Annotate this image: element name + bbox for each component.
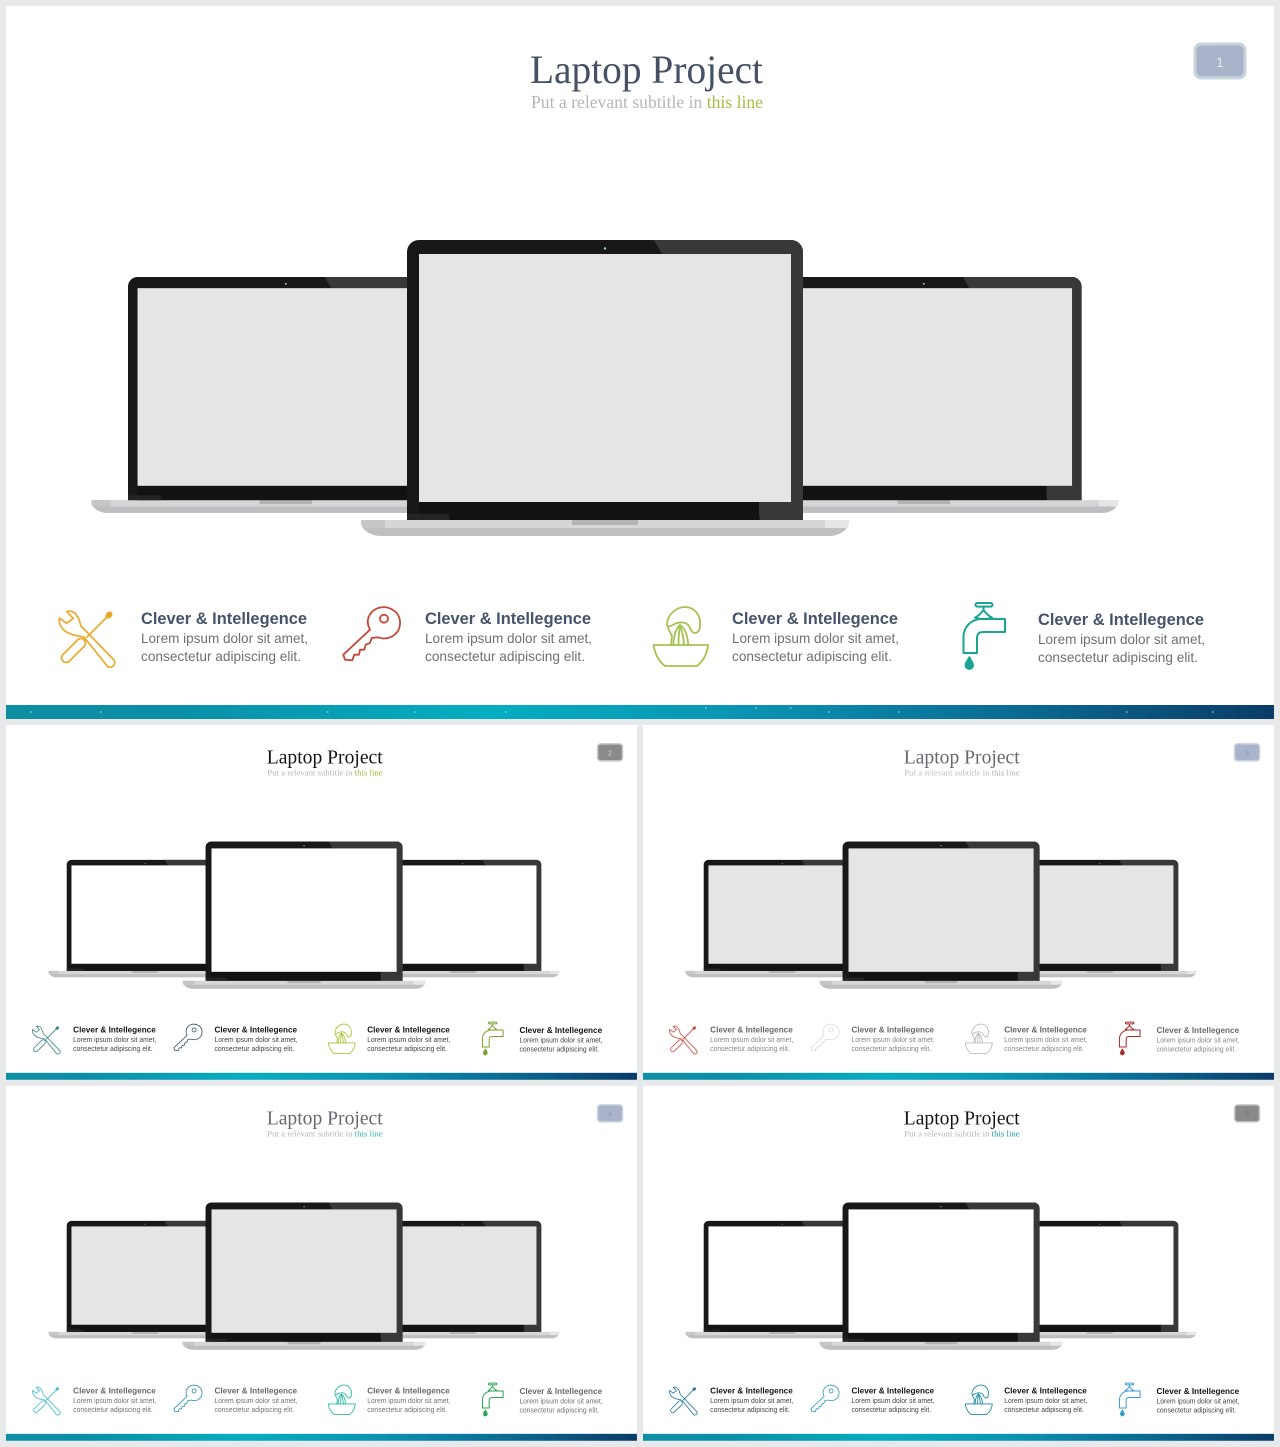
feature text 3: consectetur adipiscing elit. (367, 1046, 447, 1053)
feature text 3: consectetur adipiscing elit. (1004, 1407, 1084, 1414)
page number badge (1235, 744, 1260, 761)
icon: tools (669, 1026, 697, 1054)
page number badge: 2 (608, 750, 612, 757)
laptops (48, 841, 559, 989)
feature text 4: Clever & Intellegence (1157, 1386, 1239, 1396)
feature text 4: Clever & Intellegence (1038, 610, 1204, 629)
feature text 4: consectetur adipiscing elit. (520, 1046, 599, 1053)
feature text 2: Lorem ipsum dolor sit amet, (425, 630, 592, 646)
feature text 3: Lorem ipsum dolor sit amet, (1004, 1037, 1087, 1044)
feature text 2 (214, 1025, 298, 1053)
icon: key (174, 1385, 202, 1412)
panel: main slide 1 (6, 6, 1274, 719)
page number badge: 4 (608, 1111, 612, 1118)
feature text 3 (1004, 1386, 1087, 1414)
laptops (91, 240, 1118, 536)
icon: key (811, 1024, 839, 1051)
page number badge: 1 (1216, 54, 1224, 70)
feature text 4: Clever & Intellegence (520, 1025, 602, 1035)
feature text 1: Clever & Intellegence (73, 1386, 156, 1396)
feature text 4: consectetur adipiscing elit. (1157, 1407, 1236, 1414)
feature text 2 (214, 1386, 298, 1414)
feature text 2: consectetur adipiscing elit. (851, 1407, 931, 1414)
subtitle: Put a relevant subtitle in this line (267, 1129, 383, 1139)
feature text 3 (1004, 1025, 1087, 1053)
bottom gradient bar (6, 1434, 637, 1441)
feature text 1: consectetur adipiscing elit. (73, 1407, 153, 1414)
title: Laptop Project (267, 746, 383, 768)
subtitle: Put a relevant subtitle in this line (267, 768, 383, 778)
feature text 3: Lorem ipsum dolor sit amet, (367, 1398, 450, 1405)
feature text 1: Lorem ipsum dolor sit amet, (73, 1398, 156, 1405)
feature text 1: Lorem ipsum dolor sit amet, (710, 1037, 793, 1044)
icon: citrus juicer (328, 1024, 355, 1053)
laptops (685, 1202, 1196, 1350)
feature text 2: Clever & Intellegence (851, 1386, 934, 1396)
icon: water tap (1119, 1383, 1140, 1416)
feature text 2: Lorem ipsum dolor sit amet, (851, 1398, 935, 1405)
page number badge (598, 1105, 623, 1122)
feature text 3: Clever & Intellegence (367, 1025, 450, 1035)
feature text 3 (732, 609, 899, 664)
feature text 2: Lorem ipsum dolor sit amet, (851, 1037, 935, 1044)
feature text 2: Clever & Intellegence (214, 1025, 297, 1035)
feature text 4: consectetur adipiscing elit. (1038, 649, 1198, 665)
feature text 1: consectetur adipiscing elit. (141, 648, 301, 664)
feature text 1 (710, 1025, 793, 1053)
page number badge: 3 (1245, 750, 1249, 757)
feature text 1: consectetur adipiscing elit. (710, 1407, 790, 1414)
feature text 2: consectetur adipiscing elit. (425, 648, 585, 664)
icon: key (811, 1385, 839, 1412)
icon: citrus juicer (328, 1385, 355, 1414)
feature text 4: Lorem ipsum dolor sit amet, (1038, 631, 1205, 647)
icon: water tap (482, 1383, 503, 1416)
panel: slide 3 (643, 725, 1274, 1080)
title: Laptop Project (267, 1107, 383, 1129)
bottom gradient bar (6, 1073, 637, 1080)
feature text 2 (851, 1386, 935, 1414)
feature text 4 (1038, 610, 1205, 665)
feature text 2 (425, 609, 592, 664)
bottom gradient bar (643, 1073, 1274, 1080)
subtitle: Put a relevant subtitle in this line (904, 768, 1020, 778)
icon: citrus juicer (654, 607, 708, 666)
feature text 3: Clever & Intellegence (367, 1386, 450, 1396)
page number badge (1235, 1105, 1260, 1122)
laptops (48, 1202, 559, 1350)
feature text 1: Clever & Intellegence (141, 609, 307, 628)
feature text 1: Lorem ipsum dolor sit amet, (141, 630, 308, 646)
feature text 1: Clever & Intellegence (710, 1025, 793, 1035)
feature text 1 (73, 1025, 156, 1053)
feature text 1: consectetur adipiscing elit. (73, 1046, 153, 1053)
icon: citrus juicer (965, 1385, 992, 1414)
title: Laptop Project (530, 47, 763, 92)
feature text 1: Lorem ipsum dolor sit amet, (73, 1037, 156, 1044)
feature text 1 (73, 1386, 156, 1414)
icon: key (343, 607, 400, 660)
icon: tools (59, 611, 115, 667)
feature text 3: Clever & Intellegence (1004, 1025, 1087, 1035)
feature text 1 (141, 609, 308, 664)
feature text 4 (520, 1025, 603, 1053)
feature text 2: consectetur adipiscing elit. (214, 1046, 294, 1053)
feature text 4: Clever & Intellegence (520, 1386, 602, 1396)
feature text 3: Clever & Intellegence (1004, 1386, 1087, 1396)
feature text 2: Lorem ipsum dolor sit amet, (214, 1398, 298, 1405)
feature text 2: consectetur adipiscing elit. (851, 1046, 931, 1053)
feature text 3: Clever & Intellegence (732, 609, 898, 628)
feature text 1: Clever & Intellegence (73, 1025, 156, 1035)
icon: tools (32, 1026, 60, 1054)
feature text 2: Clever & Intellegence (214, 1386, 297, 1396)
feature text 4 (1157, 1025, 1240, 1053)
feature text 4: Lorem ipsum dolor sit amet, (1157, 1037, 1240, 1044)
feature text 3 (367, 1025, 450, 1053)
feature text 3: consectetur adipiscing elit. (1004, 1046, 1084, 1053)
feature text 1: consectetur adipiscing elit. (710, 1046, 790, 1053)
bottom gradient bar (6, 705, 1274, 719)
icon: water tap (1119, 1022, 1140, 1055)
icon: key (174, 1024, 202, 1051)
feature text 3 (367, 1386, 450, 1414)
icon: citrus juicer (965, 1024, 992, 1053)
laptops (685, 841, 1196, 989)
title: Laptop Project (904, 1107, 1020, 1129)
feature text 4 (1157, 1386, 1240, 1414)
feature text 3: Lorem ipsum dolor sit amet, (732, 630, 899, 646)
feature text 3: Lorem ipsum dolor sit amet, (1004, 1398, 1087, 1405)
subtitle: Put a relevant subtitle in this line (904, 1129, 1020, 1139)
icon: tools (669, 1387, 697, 1415)
feature text 4: Clever & Intellegence (1157, 1025, 1239, 1035)
feature text 1: Lorem ipsum dolor sit amet, (710, 1398, 793, 1405)
feature text 4: Lorem ipsum dolor sit amet, (1157, 1398, 1240, 1405)
panel: slide 5 (643, 1086, 1274, 1441)
feature text 2: Clever & Intellegence (851, 1025, 934, 1035)
feature text 1: Clever & Intellegence (710, 1386, 793, 1396)
feature text 4 (520, 1386, 603, 1414)
page number badge: 5 (1245, 1111, 1249, 1118)
feature text 3: consectetur adipiscing elit. (732, 648, 892, 664)
feature text 4: Lorem ipsum dolor sit amet, (520, 1398, 603, 1405)
feature text 2 (851, 1025, 935, 1053)
feature text 3: Lorem ipsum dolor sit amet, (367, 1037, 450, 1044)
icon: water tap (964, 603, 1005, 669)
panel: slide 4 (6, 1086, 637, 1441)
feature text 3: consectetur adipiscing elit. (367, 1407, 447, 1414)
feature text 2: consectetur adipiscing elit. (214, 1407, 294, 1414)
subtitle: Put a relevant subtitle in this line (531, 92, 763, 112)
title: Laptop Project (904, 746, 1020, 768)
feature text 4: consectetur adipiscing elit. (1157, 1046, 1236, 1053)
feature text 2: Clever & Intellegence (425, 609, 591, 628)
icon: water tap (482, 1022, 503, 1055)
page number badge (598, 744, 623, 761)
page number badge (1195, 44, 1245, 78)
feature text 4: consectetur adipiscing elit. (520, 1407, 599, 1414)
feature text 4: Lorem ipsum dolor sit amet, (520, 1037, 603, 1044)
feature text 2: Lorem ipsum dolor sit amet, (214, 1037, 298, 1044)
panel: slide 2 (6, 725, 637, 1080)
bottom gradient bar (643, 1434, 1274, 1441)
icon: tools (32, 1387, 60, 1415)
feature text 1 (710, 1386, 793, 1414)
